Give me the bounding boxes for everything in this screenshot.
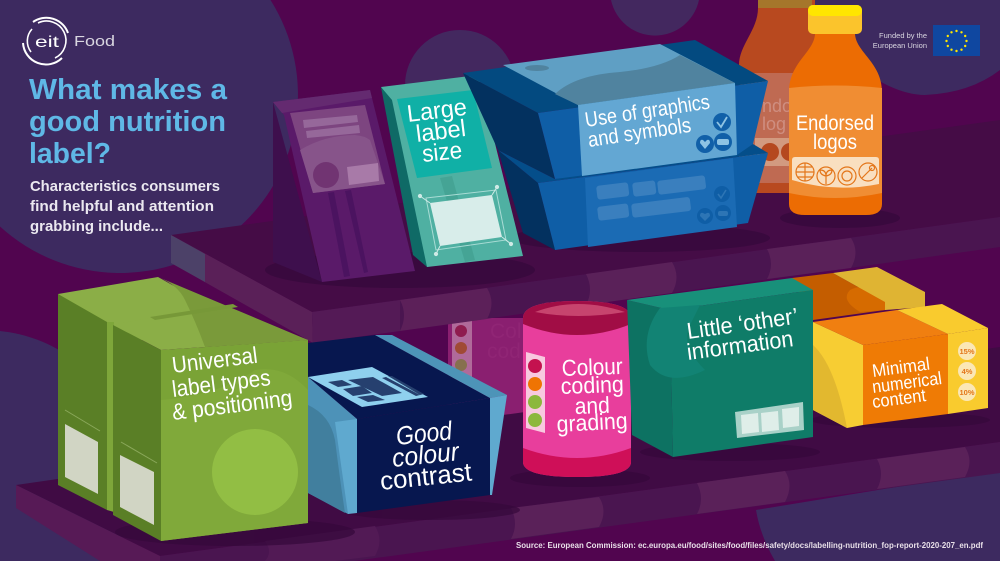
text: use of graphics and symbols: and symbols — [586, 114, 693, 152]
text: little other information — [685, 303, 800, 365]
logo: EIT Food — [23, 18, 115, 65]
heading label: large label size: size — [421, 137, 463, 168]
text: good colour contrast — [378, 415, 474, 496]
logo: EIT Food: eit — [35, 34, 60, 51]
text: colour coding and grading: coding — [560, 371, 624, 399]
text: good colour contrast: colour — [390, 436, 462, 473]
symbol icons — [696, 113, 732, 153]
top label with panels — [308, 367, 428, 407]
panel: good colour contrast navy box — [308, 335, 507, 514]
logo: EIT Food: Food — [74, 33, 115, 50]
percentage badges: 4% — [962, 367, 973, 376]
text: universal label types and positioning: label types — [170, 364, 272, 402]
panel: back bottle: ndo — [762, 96, 792, 116]
text: colour coding and grading: Colour — [561, 353, 623, 381]
subtitle text: find helpful and attention — [30, 198, 214, 215]
text: good colour contrast: Good — [394, 415, 455, 451]
heading label: large label size — [397, 90, 492, 178]
funded by EU text — [873, 31, 927, 50]
text: minimal numerical content: content — [871, 385, 927, 412]
shelf shadows — [115, 208, 990, 546]
panel: back orange box — [792, 267, 925, 320]
text: good colour contrast: contrast — [378, 456, 474, 496]
faded can on back wall: cod — [487, 340, 521, 363]
faded can on back wall: Col — [490, 320, 522, 343]
heading label: large label size: Large — [405, 94, 468, 128]
text: minimal numerical content: numerical — [871, 368, 943, 397]
title: What makes a — [29, 74, 228, 106]
panel: stacked blue boxes — [463, 40, 768, 250]
text: universal label types and positioning: & positioning — [170, 384, 294, 425]
back green box — [58, 277, 270, 512]
text: colour coding and grading — [556, 353, 628, 437]
logo strip — [792, 157, 879, 188]
lower shelf — [16, 347, 1000, 561]
lower blue box — [498, 144, 768, 250]
text: colour coding and grading: and — [574, 392, 610, 419]
subtitle text: Characteristics consumers — [30, 178, 220, 195]
panel: back bottle — [739, 0, 815, 193]
title: good nutrition — [29, 106, 226, 138]
title: label? — [29, 138, 111, 170]
panel: back bottle: log — [762, 114, 786, 134]
text: endorsed logos: Endorsed — [796, 112, 874, 135]
faded can on back wall — [448, 318, 524, 418]
icon: EU flag — [933, 25, 980, 56]
panel: universal label types green boxes — [58, 277, 308, 541]
text: universal label types and positioning — [170, 342, 294, 425]
panel: minimal numerical content box — [813, 304, 988, 428]
text: universal label types and positioning: Universal — [170, 342, 259, 378]
text: endorsed logos: logos — [813, 131, 857, 154]
text: little other information: Little ‘other’ — [685, 303, 800, 344]
percentage badges: 10% — [959, 388, 975, 397]
panel: little other information teal box — [627, 278, 813, 457]
text: use of graphics and symbols — [583, 91, 711, 152]
traffic light strip — [526, 352, 545, 433]
text: minimal numerical content: Minimal — [871, 354, 931, 381]
text: colour coding and grading: grading — [556, 407, 628, 437]
panel: purple wedge package — [273, 90, 415, 282]
front green box — [113, 277, 308, 541]
text: use of graphics and symbols: Use of graphics — [583, 91, 711, 132]
source text: Source: European Commission: ec.europa.eu/food/sites/food/files/safety/docs/labelling-nutrition_fop-report-2020-207_en.pdf — [516, 541, 983, 550]
percentage badges: 15% — [959, 347, 975, 356]
funded by EU text: Funded by the — [879, 31, 927, 40]
panel: large label size teal wedge — [381, 75, 523, 267]
label outline with corner arrows — [418, 185, 513, 256]
bottle cap — [808, 5, 862, 34]
text: little other information: information — [685, 325, 795, 365]
text: minimal numerical content — [871, 354, 943, 412]
panel: colour coding pink can — [523, 301, 631, 477]
funded by EU text: European Union — [873, 41, 927, 50]
text: endorsed logos — [796, 112, 874, 154]
upper blue box — [463, 40, 768, 179]
panel: endorsed logos orange bottle — [789, 5, 882, 215]
percentage badges — [958, 342, 976, 401]
subtitle text — [30, 178, 220, 235]
subtitle text: grabbing include... — [30, 218, 163, 235]
title — [29, 74, 228, 170]
heading label: large label size: label — [414, 115, 467, 148]
upper shelf — [171, 120, 1000, 343]
three box label — [735, 402, 804, 438]
